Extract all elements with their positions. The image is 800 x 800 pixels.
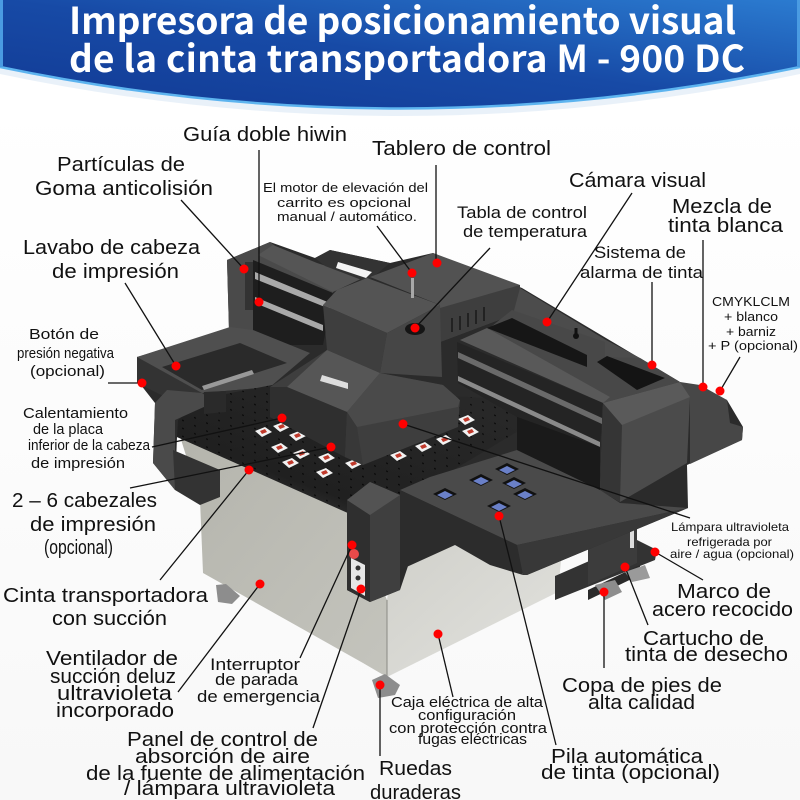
top fan unit [315,250,390,282]
callout: Ventilador de succión: incorporado [56,700,174,722]
callout: Mezcla de tinta blanca: Mezcla de [672,196,772,218]
title banner: de la cinta transportadora M - 900 DC [69,29,745,83]
callout: Partículas de goma: Partículas de [57,154,185,176]
callout: Ruedas duraderas [370,680,461,800]
cabinet base [178,430,565,677]
callout: motor de elevación: manual / automático. [277,209,417,224]
callout: Ruedas duraderas: Ruedas [379,758,452,780]
callout: Pila automática: de tinta (opcional) [541,762,720,784]
callout: Lámpara ultravioleta [398,420,794,561]
printed sample cards [255,415,479,478]
callout: Calentamiento de la placa: de impresión [31,456,125,472]
callout: Cinta transportadora [3,466,254,630]
callout: Calentamiento de la placa: inferior de la cabeza [28,438,151,454]
callout: Panel de control: Panel de control de [127,729,318,751]
callout: Marco de acero: Marco de [677,581,771,603]
callout: Ventilador de succión: Ventilador de [46,648,178,670]
callout: Calentamiento de la placa: Calentamiento [23,406,128,422]
callout: Botón de presión negativa: Botón de [29,327,99,343]
callout: Panel de control: absorción de aire [135,746,310,768]
callout: Marco de acero [650,548,793,621]
callout: Ventilador de succión: succión deluz [50,666,176,688]
callout: Panel de control [86,584,366,800]
callout: Lámpara ultravioleta: Lámpara ultravioleta [671,520,789,534]
left platform [137,327,310,420]
callout: Caja eléctrica: con protección contra [389,721,548,737]
callout: 2-6 cabezales: 2 – 6 cabezales [12,490,157,512]
callout: CMYKLCLM: + barniz [726,324,776,339]
callout: Tabla de control de temperatura: de temperatura [463,222,588,241]
callout: Interruptor de parada: de emergencia [197,687,321,706]
callout: Marco de acero: acero recocido [652,599,793,621]
callout: Lavabo de cabeza: de impresión [52,261,179,283]
callout: Copa de pies: alta calidad [588,692,695,714]
callout: Tabla de control de temperatura [410,203,588,332]
callout: Caja eléctrica: fugas eléctricas [418,732,527,748]
callout: Lavabo de cabeza: Lavabo de cabeza [23,237,201,259]
callout: Tabla de control de temperatura: Tabla de control [457,203,587,222]
back gantry [227,242,363,345]
right ink cabinet [680,382,743,464]
callout: Mezcla de tinta blanca: tinta blanca [668,215,784,237]
front column with emergency panel [347,482,400,602]
callout: Sistema de alarma de tinta: alarma de tinta [580,263,704,282]
callout: Pila automática [494,512,720,784]
callout: Caja eléctrica: Caja eléctrica de alta [391,695,544,711]
callout: Botón de presión negativa [17,327,146,388]
callout: Mezcla de tinta blanca [668,196,784,392]
print carriage [270,278,460,465]
callout: CMYKLCLM: + blanco [724,309,778,324]
callout: Calentamiento de la placa: de la placa [33,422,104,438]
casters [216,565,650,698]
callout: 2-6 cabezales: (opcional) [44,537,113,559]
callout: Lámpara ultravioleta: refrigerada por [687,535,772,549]
right gantry column [600,382,690,502]
ink top deck [460,310,680,403]
callout: motor de elevación: El motor de elevación del [263,180,428,195]
callout: Guía doble hiwin [183,124,347,306]
callout: motor de elevación [263,180,428,278]
callout: Panel de control: / lámpara ultravioleta [124,778,336,800]
callout: Copa de pies: Copa de pies de [562,675,722,697]
front plate with ink windows [400,450,688,575]
callout: Interruptor de parada: de parada [215,670,299,689]
callout: Partículas de goma: Goma anticolisión [35,178,213,200]
left front column [153,390,226,505]
callout: Ventilador de succión [46,580,264,722]
callout: Lavabo de cabeza [23,237,201,370]
callout: Caja eléctrica [389,630,548,748]
callout: Panel de control: de la fuente de alimentación [86,763,365,785]
callout: Guía doble hiwin: Guía doble hiwin [183,124,347,146]
callout: Lámpara ultravioleta: aire / agua (opcional) [670,547,794,561]
callout: Cartucho de tinta: tinta de desecho [625,644,788,666]
callout: Botón de presión negativa: presión negativa [17,346,115,362]
callout: Ventilador de succión: ultravioleta [57,683,173,705]
conveyor belt [177,385,600,514]
callout: Calentamiento de la placa [23,406,286,472]
callout: Interruptor de parada [197,540,356,706]
callout: Caja eléctrica: configuración [418,708,516,724]
callout: 2-6 cabezales: de impresión [30,514,156,536]
callout: CMYKLCLM: + P (opcional) [708,338,798,353]
callout: Tablero de control: Tablero de control [372,138,551,160]
callout: Sistema de alarma de tinta: Sistema de [594,243,686,262]
upper rear control box [370,253,520,342]
callout: Cartucho de tinta [620,562,788,666]
callout: Cinta transportadora: con succión [52,608,167,630]
callout: Sistema de alarma de tinta [580,243,704,370]
callout: Partículas de goma [35,154,248,274]
callout: Copa de pies [562,588,722,714]
title banner [0,0,800,116]
rear ink beam [512,288,680,382]
callout: motor de elevación: carrito es opcional [277,195,411,210]
callout: Botón de presión negativa: (opcional) [30,364,105,380]
callout: Cinta transportadora: Cinta transportadora [3,585,209,607]
callout: Cartucho de tinta: Cartucho de [643,628,764,650]
callout: CMYKLCLM [708,294,798,396]
callout: Interruptor de parada: Interruptor [210,655,300,674]
callout: 2-6 cabezales [12,442,336,559]
callout: Tablero de control [372,138,551,268]
right gantry rail section [457,342,603,490]
steel frame legs [555,528,657,600]
callout: Cámara visual [542,170,706,326]
printer machine illustration [137,242,743,698]
callout: Pila automática: Pila automática [551,746,704,768]
callout: CMYKLCLM: CMYKLCLM [712,294,790,309]
machine body silhouette [137,242,743,602]
callout: Cámara visual: Cámara visual [569,170,706,192]
